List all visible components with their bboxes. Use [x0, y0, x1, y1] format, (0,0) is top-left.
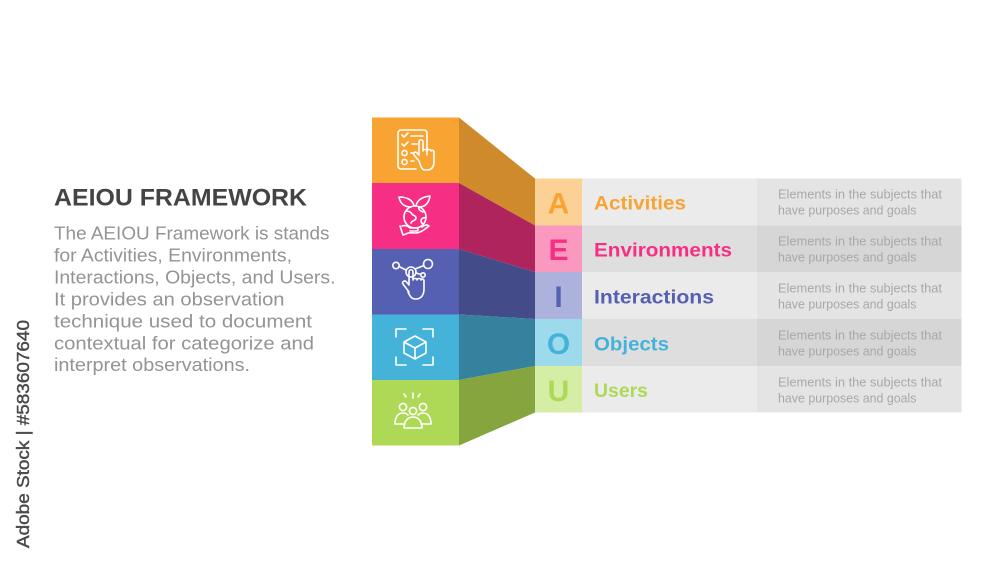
row: users: U [548, 375, 569, 408]
row: interactions: I [554, 281, 563, 314]
intro text block: technique used to document [54, 312, 312, 332]
row: objects: Objects [594, 334, 669, 356]
segment: interactions block [372, 249, 535, 319]
segment: environments block [372, 183, 535, 272]
row: users: Elements in the subjects that [778, 374, 942, 390]
row: environments: have purposes and goals [778, 250, 917, 264]
segment: activities block [372, 118, 535, 226]
row: activities: Elements in the subjects that [778, 186, 942, 202]
icon: cube in scan frame [396, 329, 433, 365]
intro text block: It provides an observation [54, 290, 284, 310]
row: activities: Activities [594, 194, 686, 214]
row: environments: E [548, 234, 569, 267]
intro text block: for Activities, Environments, [54, 246, 292, 266]
row: activities: have purposes and goals [778, 202, 917, 218]
row: interactions [535, 272, 962, 319]
icon: group of users [395, 393, 431, 428]
panel: 3D stacked column [372, 118, 535, 446]
row: objects [535, 319, 962, 366]
row: interactions: Interactions [594, 288, 714, 308]
row: objects: Elements in the subjects that [778, 328, 942, 342]
heading: AEIOU FRAMEWORK [54, 184, 308, 212]
row: users: Users [594, 381, 648, 402]
row: users [535, 366, 962, 412]
icon: globe with leaves in hand [399, 196, 430, 235]
row: interactions: Elements in the subjects that [778, 280, 942, 296]
intro text block: interpret observations. [54, 355, 250, 375]
row: objects: have purposes and goals [778, 344, 917, 358]
panel: rows table [535, 178, 962, 412]
row: environments: Elements in the subjects that [778, 234, 942, 248]
icon: network touch [393, 260, 432, 299]
row: environments [535, 226, 962, 272]
row: environments: Environments [594, 240, 732, 262]
segment: users block [372, 366, 535, 446]
segment: objects block [372, 314, 535, 380]
intro text block: contextual for categorize and [54, 334, 314, 354]
icon: checklist with pointing hand [398, 130, 434, 170]
side stock credit: Adobe Stock | #583607640 [13, 320, 33, 548]
row: activities [535, 178, 962, 226]
intro text block: Interactions, Objects, and Users. [54, 268, 336, 288]
row: interactions: have purposes and goals [778, 296, 917, 312]
intro text block: The AEIOU Framework is stands [54, 224, 330, 244]
intro text block [54, 224, 336, 375]
row: activities: A [548, 188, 569, 220]
row: users: have purposes and goals [778, 390, 917, 406]
row: objects: O [547, 328, 570, 361]
